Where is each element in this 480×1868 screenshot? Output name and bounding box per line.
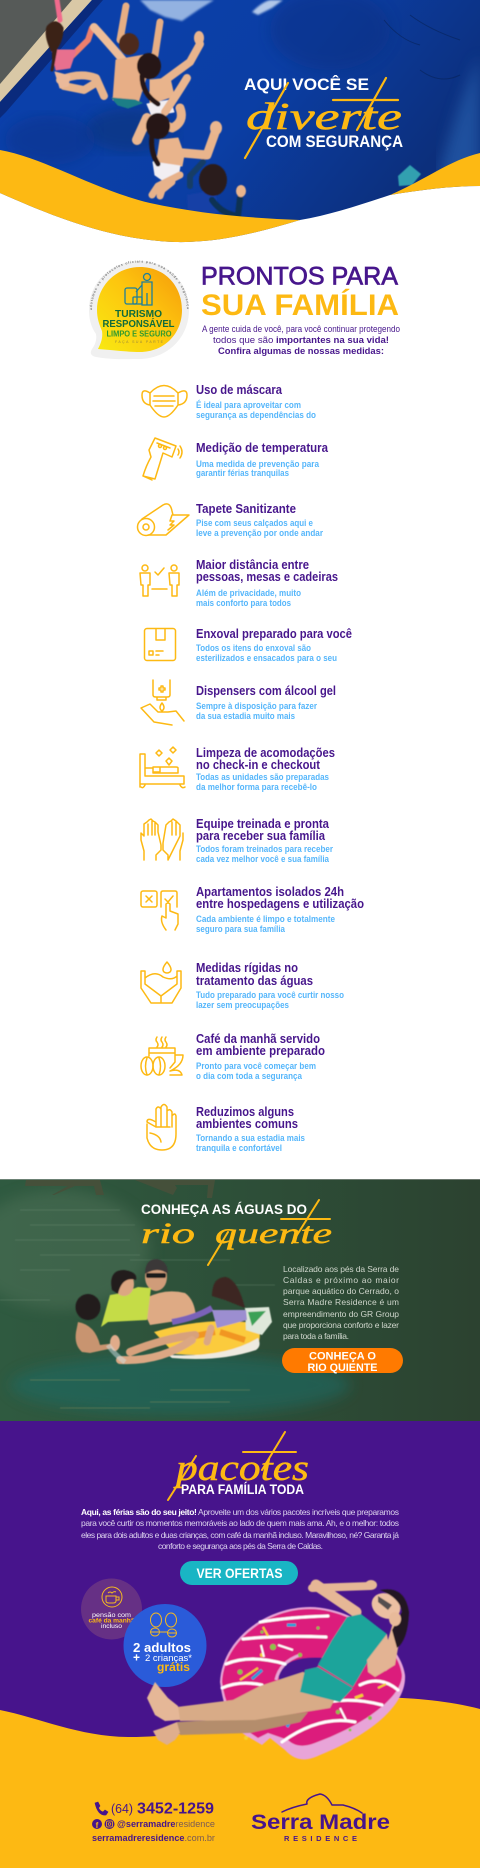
script words: rio quente: quente xyxy=(215,1217,332,1250)
icon: hands holding water drop xyxy=(141,962,181,1003)
item: uso de máscara: segurança as dependências do xyxy=(196,410,316,420)
pacotes heading xyxy=(168,1432,309,1500)
badge: pensão com café da manhã xyxy=(81,1578,142,1640)
item: medidas rígidas: tratamento das águas xyxy=(196,974,313,988)
item: uso de máscara xyxy=(142,383,316,420)
pacotes paragraph xyxy=(81,1507,399,1551)
item: uso de máscara: É ideal para aproveitar com xyxy=(196,400,301,410)
script word: diverte xyxy=(245,78,402,158)
icon: gel dispenser and hand xyxy=(141,680,184,725)
seal: turismo responsável: LIMPO E SEGURO xyxy=(106,330,172,338)
icon: raised hand xyxy=(147,1104,176,1150)
seal: turismo responsável xyxy=(89,260,189,359)
script word: pacotes: pacotes xyxy=(172,1448,309,1489)
father xyxy=(144,1291,196,1325)
item: medição de temperatura xyxy=(143,438,329,480)
item: uso de máscara: Uso de máscara xyxy=(196,383,283,397)
item: maior distância xyxy=(140,558,338,608)
item: reduzimos: Tornando a sua estadia mais xyxy=(196,1133,305,1143)
item: enxoval: esterilizados e ensacados para o seu xyxy=(196,653,337,663)
item: tapete sanitizante: Pise com seus calçados aqui e xyxy=(196,518,313,528)
badge: 2 adultos + 2 crianças grátis xyxy=(124,1604,206,1687)
item: medição de temperatura: garantir férias tranquilas xyxy=(196,468,289,478)
child 5 xyxy=(190,162,203,186)
pacotes heading: PARA FAMÍLIA TODA xyxy=(181,1482,304,1497)
intro text: todos que são importantes na sua vida! xyxy=(213,335,389,346)
icon: mask xyxy=(142,386,187,417)
button: ver ofertas: VER OFERTAS xyxy=(196,1566,282,1581)
icon: family faces xyxy=(150,1613,177,1637)
item: equipe: Todos foram treinados para receber xyxy=(196,844,333,854)
icon: two people distance xyxy=(140,565,179,596)
icon: instagram xyxy=(104,1819,114,1829)
icon: traveller with luggage xyxy=(125,274,152,305)
panel: rio quente photo xyxy=(0,1179,480,1421)
badge: 2 adultos + 2 crianças grátis: 2 crianças* xyxy=(145,1653,193,1663)
heading: prontos para sua família xyxy=(201,262,400,357)
item: apartamentos: entre hospedagens e utilização xyxy=(196,897,364,911)
item: café da manhã: o dia com toda a segurança xyxy=(196,1071,303,1081)
item: equipe xyxy=(141,817,333,864)
logo: serra madre residence xyxy=(251,1794,390,1843)
item: café da manhã: Pronto para você começar bem xyxy=(196,1061,316,1071)
item: tapete sanitizante xyxy=(138,502,323,538)
footer yellow wave xyxy=(0,1697,480,1868)
item: limpeza: no check-in e checkout xyxy=(196,758,321,772)
item: medidas rígidas: Medidas rígidas no xyxy=(196,961,298,975)
badge: 2 adultos + 2 crianças grátis: + xyxy=(133,1650,140,1664)
pacotes paragraph: eles para dois adultos e duas crianças, com café da manhã incluso. Maravilhoso, né? Garanta já xyxy=(81,1530,399,1540)
item: dispensers: Sempre à disposição para fazer xyxy=(196,701,317,711)
hero headline xyxy=(244,75,403,158)
badge: pensão com café da manhã: incluso xyxy=(101,1623,122,1630)
seal: turismo responsável: RESPONSÁVEL xyxy=(102,317,174,330)
footer contacts: serramadreresidence.com.br xyxy=(92,1833,215,1843)
item: medidas rígidas xyxy=(141,961,344,1010)
donut float xyxy=(220,1607,405,1759)
item: dispensers xyxy=(141,680,336,725)
seal: turismo responsável: TURISMO xyxy=(115,309,162,320)
footer contacts: (64) xyxy=(111,1802,133,1816)
item: equipe: cada vez melhor você e sua família xyxy=(196,854,330,864)
intro text: Confira algumas de nossas medidas: xyxy=(218,346,384,357)
script words: rio quente: rio xyxy=(141,1217,195,1250)
rio quente paragraph xyxy=(283,1264,399,1341)
heading: prontos para sua família: SUA FAMÍLIA xyxy=(201,288,399,322)
footer contacts: 3452-1259 xyxy=(137,1800,214,1818)
icon: coffee cup and beans xyxy=(141,1037,183,1075)
badge: pensão com café da manhã: café da manhã xyxy=(88,1618,135,1624)
logo: serra madre residence: RESIDENCE xyxy=(284,1834,357,1843)
script words: rio quente xyxy=(141,1200,332,1265)
hero headline: AQUI VOCÊ SE xyxy=(244,75,369,94)
item: medidas rígidas: Tudo preparado para você curtir nosso xyxy=(196,990,344,1000)
photo: woman on donut float xyxy=(147,1580,409,1759)
hero headline: COM SEGURANÇA xyxy=(266,133,403,151)
icon: mat roll xyxy=(138,504,189,536)
item: medidas rígidas: lazer sem preocupações xyxy=(196,1000,289,1010)
item: reduzimos: Reduzimos alguns xyxy=(196,1105,294,1119)
item: café da manhã: em ambiente preparado xyxy=(196,1044,325,1058)
woman xyxy=(147,1580,409,1745)
item: café da manhã xyxy=(141,1032,325,1081)
item: enxoval: Todos os itens do enxoval são xyxy=(196,643,311,653)
footer contacts xyxy=(92,1800,215,1843)
item: apartamentos: Apartamentos isolados 24h xyxy=(196,885,344,899)
item: enxoval: Enxoval preparado para você xyxy=(196,627,352,641)
button: conheça o rio quente: CONHEÇA O xyxy=(309,1350,376,1362)
item: apartamentos: seguro para sua família xyxy=(196,924,286,934)
pacotes paragraph: para você curtir os momentos memoráveis ao lado de quem mais ama. Ah, e o melhor: todos xyxy=(81,1518,399,1528)
intro text: A gente cuida de você, para você continuar protegendo xyxy=(202,324,400,334)
child 1 xyxy=(57,0,60,20)
item: maior distância: mais conforto para todos xyxy=(196,598,291,608)
item: reduzimos: tranquila e confortável xyxy=(196,1143,282,1153)
icon: phone xyxy=(95,1802,108,1815)
badge: pensão com café da manhã: pensão com xyxy=(92,1612,131,1619)
item: reduzimos xyxy=(147,1104,305,1153)
item: medição de temperatura: Medição de temperatura xyxy=(196,441,329,455)
pacotes paragraph: conforto e segurança aos pés da Serra de Caldas. xyxy=(158,1541,323,1551)
item: dispensers: da sua estadia muito mais xyxy=(196,711,295,721)
item: medição de temperatura: Uma medida de prevenção para xyxy=(196,459,320,469)
icon: gloved hands xyxy=(141,819,183,860)
item: limpeza xyxy=(140,746,335,792)
logo: serra madre residence: Serra Madre xyxy=(251,1811,390,1834)
badge: 2 adultos + 2 crianças grátis: grátis xyxy=(157,1660,190,1674)
item: apartamentos: Cada ambiente é limpo e totalmente xyxy=(196,914,335,924)
heading: prontos para sua família: PRONTOS PARA xyxy=(201,262,398,290)
seal: turismo responsável: FAÇA SUA PARTE xyxy=(115,340,164,344)
icon: checkbox selection xyxy=(141,891,178,930)
child 3 xyxy=(160,44,200,84)
icon: infrared thermometer xyxy=(143,438,182,480)
footer contacts: @serramadreresidence xyxy=(117,1819,215,1829)
item: limpeza: da melhor forma para recebê-lo xyxy=(196,782,317,792)
rio quente paragraph: Caldas e próximo ao maior xyxy=(283,1275,399,1285)
rio quente heading: CONHEÇA AS ÁGUAS DO xyxy=(141,1202,307,1217)
pacotes paragraph: Aqui, as férias são do seu jeito! Aproveite um dos vários pacotes incríveis que preparamos xyxy=(81,1507,399,1517)
rio quente paragraph: para toda a família. xyxy=(283,1331,349,1341)
panel: pacotes purple background xyxy=(0,1421,480,1741)
item: maior distância: Além de privacidade, muito xyxy=(196,588,301,598)
item: tapete sanitizante: leve a prevenção por onde andar xyxy=(196,528,323,538)
button: ver ofertas xyxy=(180,1561,298,1585)
item: maior distância: Maior distância entre xyxy=(196,558,309,572)
girl xyxy=(130,1335,195,1352)
icon: box xyxy=(144,628,176,660)
seal arc caption: adotamos os protocolos oficiais para sua saúde e segurança xyxy=(90,260,189,310)
rio quente paragraph: Serra Madre Residence é um xyxy=(283,1297,399,1307)
intro text xyxy=(202,324,400,357)
child 2 xyxy=(120,6,160,55)
item: dispensers: Dispensers com álcool gel xyxy=(196,684,336,698)
item: maior distância: pessoas, mesas e cadeiras xyxy=(196,570,338,584)
item: limpeza: Limpeza de acomodações xyxy=(196,746,335,760)
photo: children jumping xyxy=(47,0,246,216)
script word: diverte: diverte xyxy=(246,96,402,138)
item: limpeza: Todas as unidades são preparadas xyxy=(196,772,329,782)
rio quente paragraph: parque aquático do Cerrado, o xyxy=(283,1286,399,1296)
item: equipe: Equipe treinada e pronta xyxy=(196,817,330,831)
script word: pacotes xyxy=(168,1432,309,1500)
boy in lime shirt xyxy=(101,1287,151,1327)
icon: coffee cup xyxy=(102,1587,122,1607)
float xyxy=(154,1321,260,1355)
rio quente paragraph: que proporciona conforto e lazer xyxy=(283,1320,399,1330)
badge: 2 adultos + 2 crianças grátis: 2 adultos xyxy=(133,1640,191,1655)
item: enxoval xyxy=(144,627,352,663)
item: equipe: para receber sua família xyxy=(196,829,326,843)
photo: family in the water xyxy=(76,1259,272,1362)
item: reduzimos: ambientes comuns xyxy=(196,1117,298,1131)
item: café da manhã: Café da manhã servido xyxy=(196,1032,320,1046)
icon: bed with sparkles xyxy=(140,747,185,788)
rio quente paragraph: empreendimento do GR Group xyxy=(283,1309,399,1319)
rio quente paragraph: Localizado aos pés da Serra de xyxy=(283,1264,399,1274)
item: tapete sanitizante: Tapete Sanitizante xyxy=(196,502,296,516)
item: apartamentos xyxy=(141,885,364,934)
button: conheça o rio quente xyxy=(282,1348,403,1374)
child 4 xyxy=(172,130,216,155)
rio quente heading xyxy=(141,1200,332,1265)
button: conheça o rio quente: RIO QUIENTE xyxy=(308,1362,378,1374)
boy on the left xyxy=(76,1322,118,1353)
icon: facebook: f xyxy=(96,1821,99,1830)
panel: hero photo xyxy=(0,0,480,245)
hero waves xyxy=(0,150,480,250)
